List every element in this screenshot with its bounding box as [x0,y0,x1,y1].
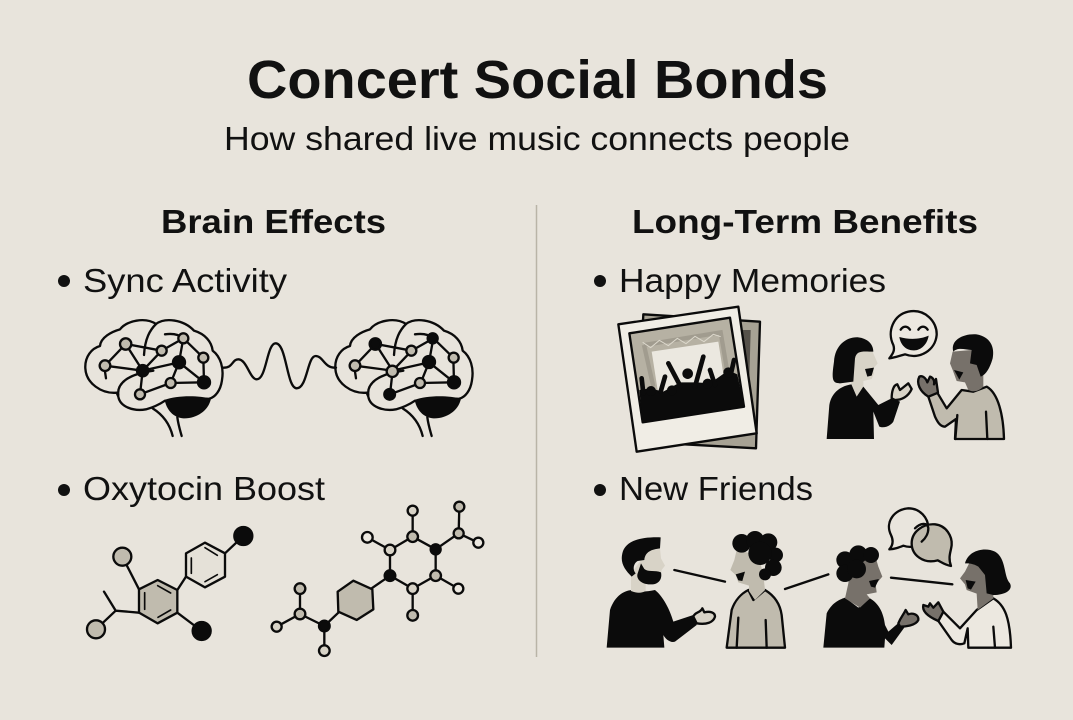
speech bubble with smile [889,311,937,358]
curly-haired friend [727,531,785,648]
woman in light shirt [923,549,1011,648]
heading: Long-Term Benefits: Long-Term Benefits [632,203,978,240]
illustration: molecule right [272,502,483,656]
brain: right [335,320,473,436]
illustration: concert photos [618,307,760,452]
title: Concert Social Bonds [247,50,828,110]
illustration: molecule left [87,527,252,640]
heading: Brain Effects: Brain Effects [161,203,386,240]
friend in black shirt [823,545,918,648]
sync wave [223,343,336,388]
bullet: Oxytocin Boost: Oxytocin Boost [83,470,325,507]
man [918,334,1004,439]
bearded man [607,537,715,648]
bullet: New Friends: New Friends [619,470,813,507]
woman [827,337,912,439]
illustration: new friends [607,508,1011,648]
illustration: two people sharing a laugh [827,311,1004,439]
illustration: synchronized brains [85,320,473,436]
connecting lines [674,570,952,589]
overlapping chat bubbles [889,508,952,566]
bullet: Sync Activity: Sync Activity [83,262,288,299]
subtitle: How shared live music connects people [224,120,850,157]
brain: left [85,320,223,436]
bullet: Happy Memories: Happy Memories [619,262,886,299]
